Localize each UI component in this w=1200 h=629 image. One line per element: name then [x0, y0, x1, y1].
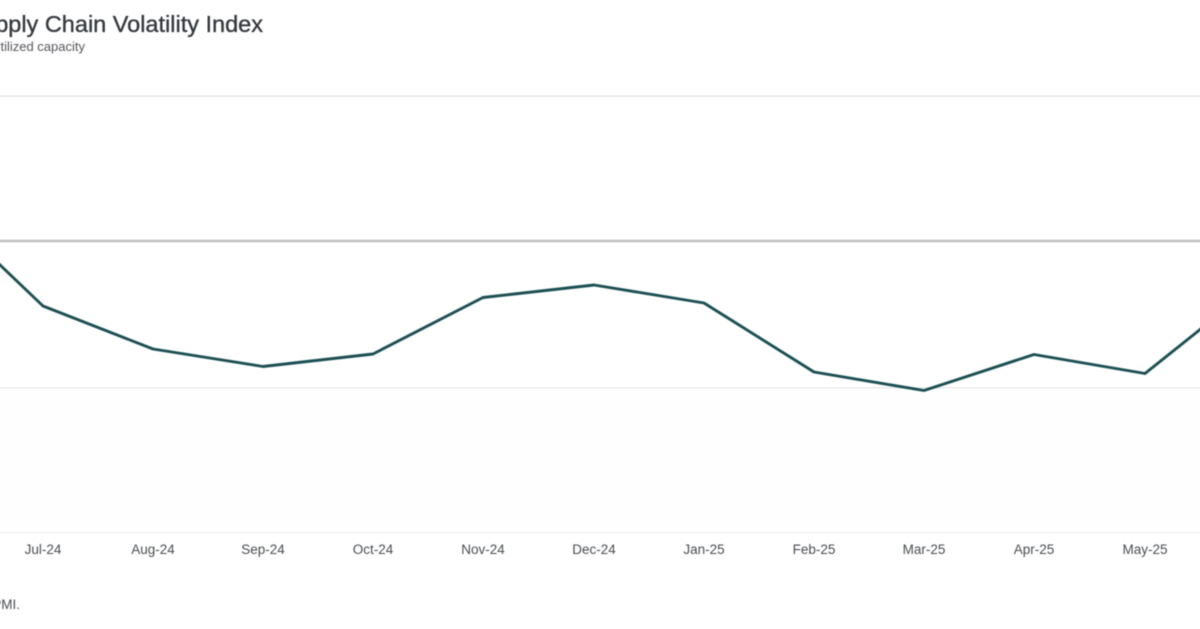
label: May-25: May-25	[1122, 542, 1168, 557]
label: Oct-24: Oct-24	[353, 542, 394, 557]
label: Jul-24: Jul-24	[25, 542, 62, 557]
label: Nov-24: Nov-24	[461, 542, 505, 557]
x-axis month labels	[25, 542, 1168, 557]
label: Dec-24: Dec-24	[572, 542, 616, 557]
label: Aug-24: Aug-24	[131, 542, 175, 557]
label: Mar-25: Mar-25	[903, 542, 945, 557]
label: Jan-25: Jan-25	[683, 542, 725, 557]
data line	[0, 263, 1200, 390]
plot background	[0, 388, 1200, 533]
label: Feb-25: Feb-25	[793, 542, 835, 557]
label: Apr-25: Apr-25	[1014, 542, 1054, 557]
label: Sep-24: Sep-24	[241, 542, 285, 557]
